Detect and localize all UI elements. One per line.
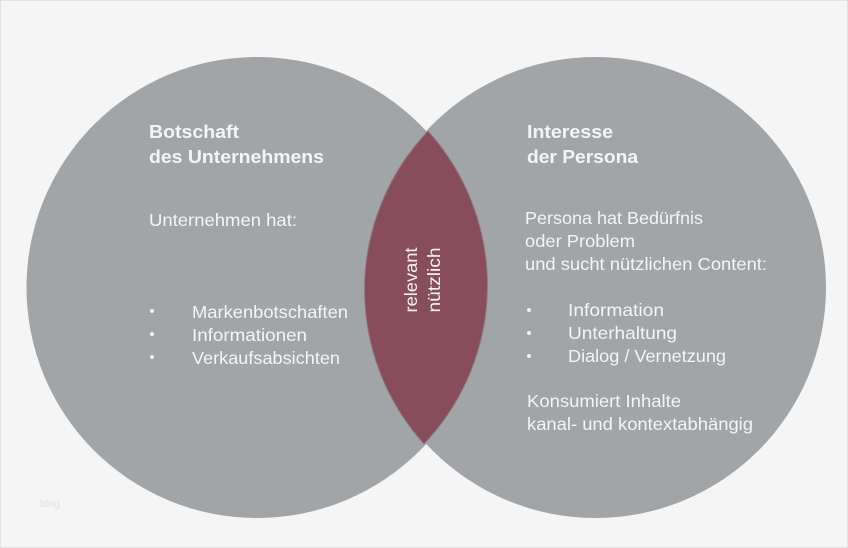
right heading: Interesse (527, 122, 613, 142)
right heading: der Persona (527, 147, 639, 167)
lens text: nützlich (424, 248, 444, 312)
right closing note: kanal- und kontextabhängig (527, 414, 753, 434)
left heading: Botschaft (149, 122, 239, 142)
right list: Information (568, 300, 664, 320)
left list: Informationen (192, 325, 307, 345)
right closing note: Konsumiert Inhalte (527, 391, 681, 411)
right intro: und sucht nützlichen Content: (525, 254, 767, 274)
circle: Interesse der Persona (365, 57, 826, 518)
right heading (527, 122, 639, 167)
right closing note (527, 391, 753, 434)
right list: Dialog / Vernetzung (568, 346, 726, 366)
left list: Markenbotschaften (192, 302, 348, 322)
lens text (401, 247, 444, 312)
right intro: oder Problem (525, 231, 635, 251)
lens text: relevant (401, 247, 421, 312)
left list: Verkaufsabsichten (192, 348, 340, 368)
right intro (525, 208, 767, 274)
right list: Unterhaltung (568, 323, 677, 343)
overlap lens (364, 131, 488, 444)
left heading: des Unternehmens (149, 147, 324, 167)
watermark: blog (40, 499, 60, 510)
left list (150, 302, 348, 368)
left intro: Unternehmen hat: (149, 210, 297, 230)
left heading (149, 122, 324, 167)
right intro: Persona hat Bedürfnis (525, 208, 703, 228)
circle: Botschaft des Unternehmens (26, 57, 488, 518)
right list (527, 300, 726, 366)
